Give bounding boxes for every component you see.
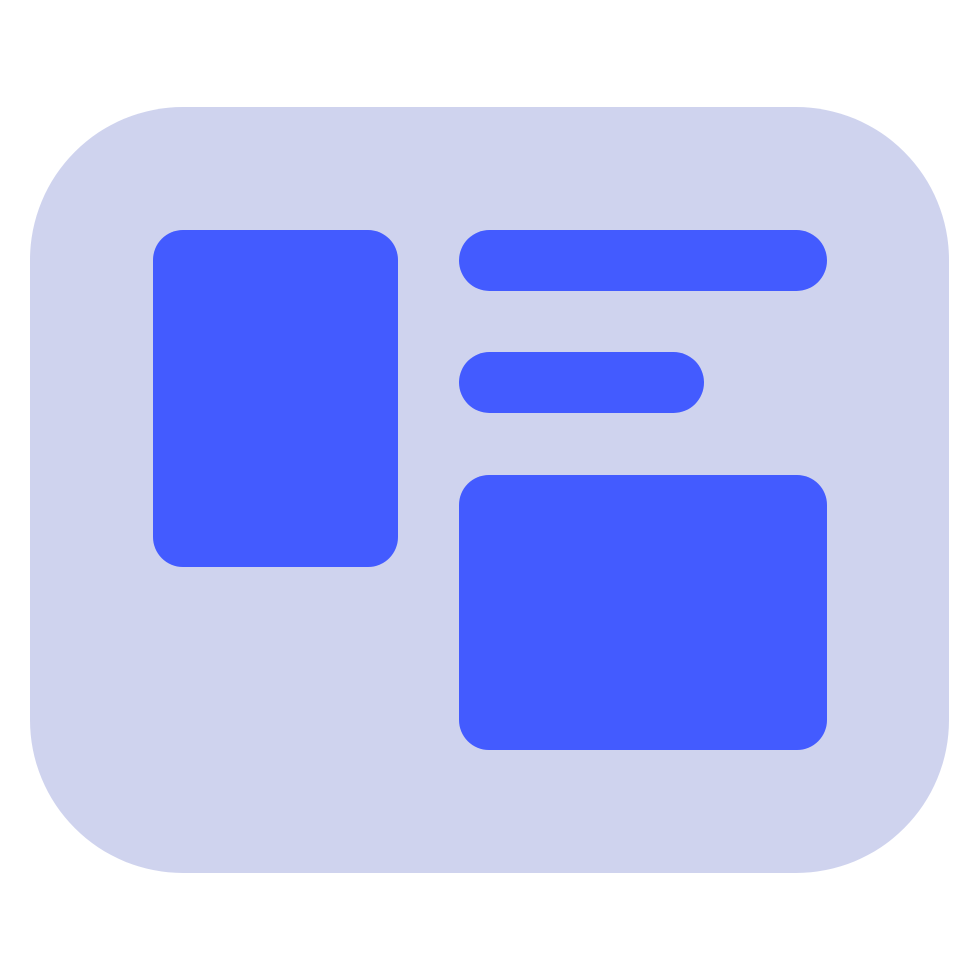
card background	[30, 107, 949, 873]
short text bar	[459, 352, 704, 413]
left image block	[153, 230, 398, 567]
long text bar	[459, 230, 827, 291]
icon: layout card	[30, 107, 949, 873]
lower right block	[459, 475, 827, 750]
